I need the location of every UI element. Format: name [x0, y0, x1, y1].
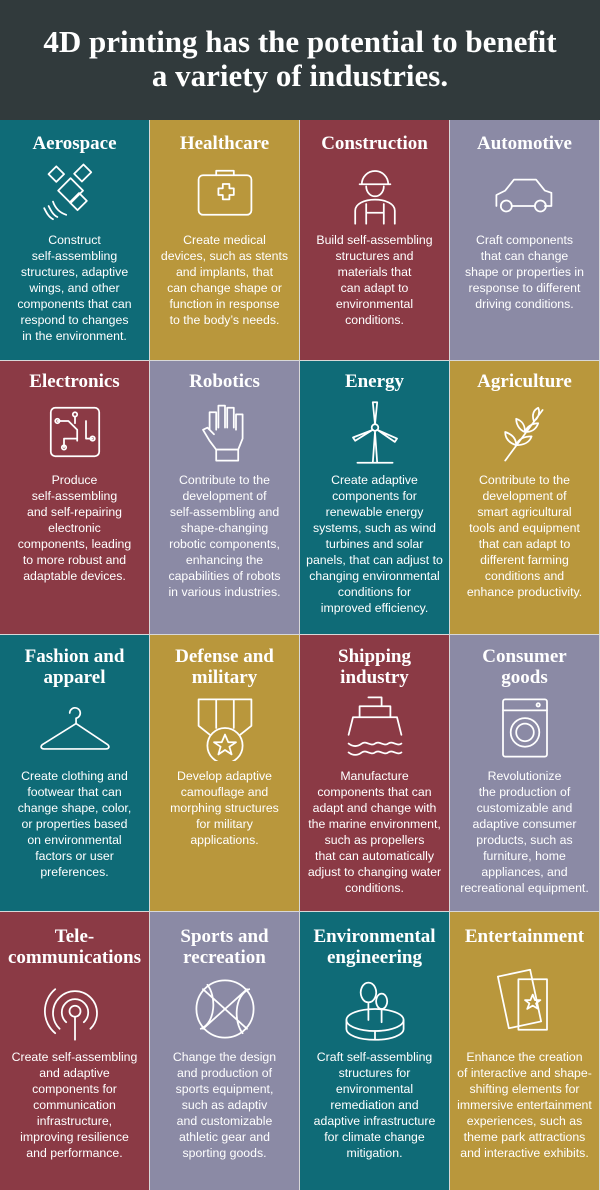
text: sports: sporting goods. — [182, 1146, 267, 1160]
text: environmental engineering: adaptive infrastructure — [314, 1114, 435, 1128]
text: shipping: Manufacture — [340, 769, 409, 783]
text: shipping: adjust to changing water — [308, 865, 441, 879]
panel: construction — [300, 120, 449, 360]
text: telecommunications: infrastructure, — [37, 1114, 112, 1128]
text: defense — [170, 769, 279, 847]
text: healthcare — [161, 233, 288, 327]
text: agriculture: that can adapt to — [479, 537, 570, 551]
panel: telecommunications — [0, 912, 149, 1190]
text: healthcare: and implants, that — [176, 265, 273, 279]
text: energy: turbines and solar — [326, 537, 423, 551]
text: energy: components for — [332, 489, 417, 503]
text: telecommunications: and performance. — [26, 1146, 123, 1160]
text: construction — [316, 233, 433, 327]
text: consumer goods: products, such as — [476, 833, 573, 847]
panel: fashion — [0, 635, 149, 911]
text: electronics: electronic — [48, 521, 101, 535]
text: energy: renewable energy — [326, 505, 423, 519]
icon: medical kit — [198, 170, 252, 216]
heading: fashion: apparel — [44, 667, 105, 688]
icon: wind turbine — [352, 401, 398, 464]
text: agriculture: development of — [482, 489, 567, 503]
text: automotive: driving conditions. — [475, 297, 574, 311]
text: telecommunications: and adaptive — [39, 1066, 110, 1080]
text: sports — [173, 1050, 276, 1160]
text: robotics: enhancing the — [186, 553, 263, 567]
text: shipping: conditions. — [345, 881, 404, 895]
heading: agriculture: Agriculture — [477, 371, 572, 392]
icon: land with trees — [346, 982, 404, 1041]
title — [0, 0, 600, 120]
text: sports: and production of — [177, 1066, 272, 1080]
text: shipping: that can automatically — [315, 849, 434, 863]
text: automotive — [465, 233, 584, 311]
text: energy: panels, that can adjust to — [306, 553, 443, 567]
text: entertainment: and interactive exhibits. — [460, 1146, 589, 1160]
text: energy: improved efficiency. — [321, 601, 428, 615]
text: construction: can adapt to — [341, 281, 408, 295]
heading: consumer goods — [482, 646, 567, 688]
panel: environmental engineering — [300, 912, 449, 1190]
text: environmental engineering: for climate change — [324, 1130, 425, 1144]
panel: defense — [150, 635, 299, 911]
text: telecommunications: components for — [32, 1082, 117, 1096]
text: fashion: preferences. — [40, 865, 109, 879]
heading: healthcare: Healthcare — [180, 133, 269, 154]
text: sports: and customizable — [177, 1114, 272, 1128]
heading: telecommunications: Tele- — [55, 926, 94, 947]
text: shipping: the marine environment, — [308, 817, 441, 831]
heading: environmental engineering: Environmental — [313, 926, 436, 947]
text: fashion: on environmental — [27, 833, 122, 847]
icon: washing machine — [502, 698, 548, 758]
text: shipping: components that can — [317, 785, 432, 799]
heading: consumer goods: goods — [501, 667, 548, 688]
text: environmental engineering: structures for — [339, 1066, 410, 1080]
icon: wheat — [504, 406, 544, 462]
text: aerospace — [17, 233, 132, 343]
text: sports: Change the design — [173, 1050, 276, 1064]
text: construction: materials that — [338, 265, 411, 279]
icon: ball — [196, 980, 254, 1038]
text: entertainment: shifting elements for — [469, 1082, 580, 1096]
text: healthcare: to the body’s needs. — [170, 313, 279, 327]
text: consumer goods: Revolutionize — [488, 769, 561, 783]
text: construction: conditions. — [345, 313, 404, 327]
text: energy: changing environmental — [309, 569, 440, 583]
text: robotics: self-assembling and — [170, 505, 279, 519]
text: defense: applications. — [190, 833, 259, 847]
text: entertainment: experiences, such as — [467, 1114, 582, 1128]
text: automotive: Craft components — [476, 233, 573, 247]
text: healthcare: devices, such as stents — [161, 249, 288, 263]
heading: sports: recreation — [183, 947, 266, 968]
text: aerospace: components that can — [17, 297, 132, 311]
text: agriculture: enhance productivity. — [467, 585, 582, 599]
heading: fashion: Fashion and — [25, 646, 124, 667]
heading: sports: Sports and — [180, 926, 269, 947]
text: electronics: adaptable devices. — [23, 569, 126, 583]
text: aerospace: wings, and other — [29, 281, 120, 295]
heading: defense: military — [192, 667, 257, 688]
icon: hanger — [40, 707, 110, 750]
text: entertainment: theme park attractions — [464, 1130, 585, 1144]
icon: satellite — [43, 164, 92, 220]
text: entertainment: of interactive and shape- — [457, 1066, 592, 1080]
text: robotics — [168, 473, 281, 599]
text: aerospace: self-assembling — [32, 249, 117, 263]
panel: electronics — [0, 361, 149, 634]
heading: shipping: Shipping — [338, 646, 411, 667]
heading: fashion — [24, 646, 124, 688]
text: consumer goods: furniture, home — [483, 849, 566, 863]
icon: robot hand — [202, 404, 244, 462]
panel: entertainment — [450, 912, 599, 1190]
text: defense: morphing structures — [170, 801, 279, 815]
text: aerospace: structures, adaptive — [21, 265, 128, 279]
text: entertainment: immersive entertainment — [457, 1098, 592, 1112]
heading: electronics: Electronics — [29, 371, 120, 392]
heading: environmental engineering: engineering — [327, 947, 422, 968]
text: aerospace: Construct — [48, 233, 101, 247]
text: robotics: robotic components, — [169, 537, 280, 551]
heading: construction: Construction — [321, 133, 428, 154]
heading: environmental engineering — [313, 926, 436, 968]
text: agriculture: smart agricultural — [477, 505, 572, 519]
text: fashion: factors or user — [35, 849, 114, 863]
text: telecommunications: Create self-assembling — [12, 1050, 137, 1064]
text: sports: such as adaptiv — [182, 1098, 267, 1112]
heading: entertainment: Entertainment — [465, 926, 584, 947]
panel: aerospace — [0, 120, 149, 360]
text: robotics: in various industries. — [168, 585, 281, 599]
text: environmental engineering: Craft self-assembling — [317, 1050, 432, 1064]
heading: shipping: industry — [340, 667, 409, 688]
text: electronics: and self-repairing — [27, 505, 122, 519]
text: electronics: to more robust and — [23, 553, 126, 567]
text: aerospace: in the environment. — [22, 329, 127, 343]
heading: telecommunications — [8, 926, 141, 968]
icon: signal — [44, 988, 98, 1041]
text: consumer goods: adaptive consumer — [473, 817, 576, 831]
text: energy: systems, such as wind — [313, 521, 436, 535]
text: consumer goods: appliances, and — [481, 865, 568, 879]
text: fashion: or properties based — [22, 817, 127, 831]
text: robotics: development of — [182, 489, 267, 503]
text: environmental engineering: remediation and — [330, 1098, 419, 1112]
panel: shipping — [300, 635, 449, 911]
icon: tickets — [497, 968, 548, 1031]
text: fashion: footwear that can — [27, 785, 122, 799]
panel: sports — [150, 912, 299, 1190]
text: healthcare: function in response — [169, 297, 280, 311]
icon: ship — [348, 696, 402, 756]
text: healthcare: Create medical — [183, 233, 266, 247]
text: agriculture — [467, 473, 582, 599]
text: shipping: such as propellers — [325, 833, 424, 847]
text: robotics: shape-changing — [181, 521, 268, 535]
text: electronics: self-assembling — [32, 489, 117, 503]
text: construction: structures and — [336, 249, 413, 263]
text: fashion: Create clothing and — [21, 769, 128, 783]
text: entertainment: Enhance the creation — [466, 1050, 583, 1064]
title: 4D printing has the potential to benefit — [43, 24, 557, 59]
text: automotive: that can change — [481, 249, 568, 263]
icon: medal — [198, 698, 252, 761]
text: agriculture: tools and equipment — [469, 521, 580, 535]
text: shipping — [308, 769, 441, 895]
text: entertainment — [457, 1050, 592, 1160]
text: sports: sports equipment, — [176, 1082, 273, 1096]
icon: circuit — [50, 406, 100, 458]
text: electronics: Produce — [52, 473, 97, 487]
text: agriculture: conditions and — [485, 569, 564, 583]
text: construction: environmental — [336, 297, 413, 311]
text: defense: Develop adaptive — [177, 769, 272, 783]
text: telecommunications: communication — [33, 1098, 116, 1112]
heading: consumer goods: Consumer — [482, 646, 567, 667]
text: environmental engineering: environmental — [336, 1082, 413, 1096]
panel: healthcare — [150, 120, 299, 360]
text: defense: camouflage and — [181, 785, 268, 799]
panel: energy — [300, 361, 449, 634]
text: telecommunications: improving resilience — [20, 1130, 129, 1144]
text: agriculture: Contribute to the — [479, 473, 570, 487]
text: agriculture: different farming — [480, 553, 569, 567]
text: robotics: Contribute to the — [179, 473, 270, 487]
heading: defense: Defense and — [175, 646, 274, 667]
text: environmental engineering — [314, 1050, 435, 1160]
text: fashion: change shape, color, — [18, 801, 131, 815]
text: electronics — [18, 473, 131, 583]
text: consumer goods: customizable and — [477, 801, 572, 815]
heading: defense — [175, 646, 274, 688]
icon: car — [496, 178, 552, 212]
text: consumer goods: the production of — [479, 785, 570, 799]
heading: robotics: Robotics — [189, 371, 260, 392]
panel: automotive — [450, 120, 599, 360]
text: consumer goods: recreational equipment. — [460, 881, 589, 895]
heading: shipping — [338, 646, 411, 688]
text: energy: Create adaptive — [331, 473, 418, 487]
heading: telecommunications: communications — [8, 947, 141, 968]
text: automotive: shape or properties in — [465, 265, 584, 279]
text: shipping: adapt and change with — [313, 801, 436, 815]
heading: aerospace: Aerospace — [32, 133, 117, 154]
text: construction: Build self-assembling — [316, 233, 433, 247]
text: sports: athletic gear and — [179, 1130, 270, 1144]
panel: consumer goods — [450, 635, 599, 911]
text: consumer goods — [460, 769, 589, 895]
text: defense: for military — [196, 817, 253, 831]
text: energy: conditions for — [338, 585, 411, 599]
text: aerospace: respond to changes — [20, 313, 129, 327]
text: fashion — [18, 769, 131, 879]
icon: worker — [354, 170, 396, 225]
text: energy — [306, 473, 443, 615]
heading: energy: Energy — [345, 371, 404, 392]
text: telecommunications — [12, 1050, 137, 1160]
heading: automotive: Automotive — [477, 133, 572, 154]
text: robotics: capabilities of robots — [168, 569, 281, 583]
text: environmental engineering: mitigation. — [346, 1146, 403, 1160]
text: healthcare: can change shape or — [167, 281, 282, 295]
title: a variety of industries. — [152, 58, 448, 93]
heading: sports — [180, 926, 269, 968]
panel: robotics — [150, 361, 299, 634]
text: electronics: components, leading — [18, 537, 131, 551]
panel: agriculture — [450, 361, 599, 634]
text: automotive: response to different — [469, 281, 580, 295]
